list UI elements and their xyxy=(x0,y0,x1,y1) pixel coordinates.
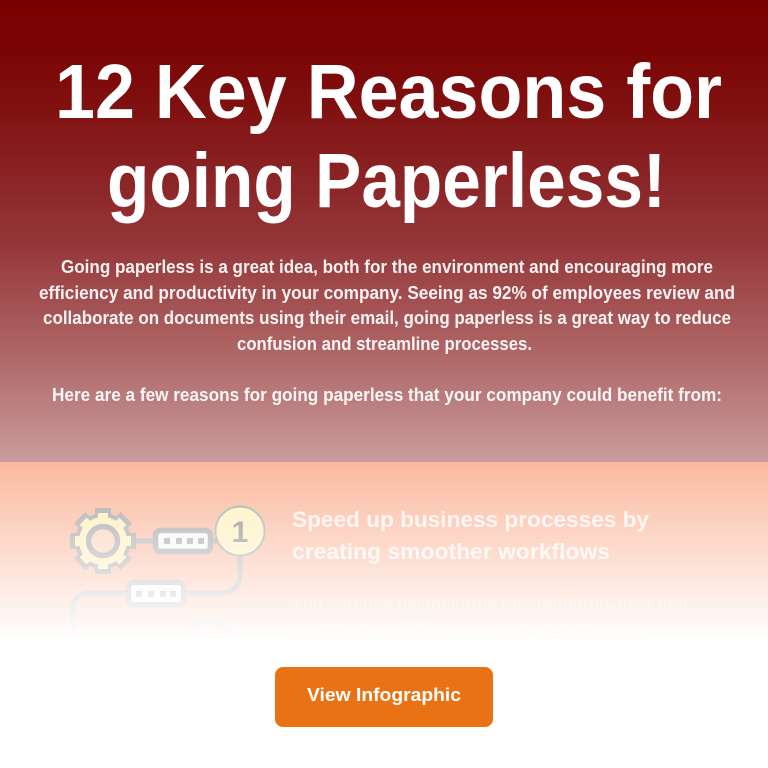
number badge 1 xyxy=(216,506,264,556)
icon: gear xyxy=(70,508,136,574)
next step circle xyxy=(187,622,233,668)
intro text block: Here are a few reasons for going paperless that your company could benefit from: xyxy=(52,385,722,405)
button: view infographic: View Infographic xyxy=(307,685,461,705)
peach panel: reason 1 background xyxy=(0,462,768,768)
reason 1 heading xyxy=(292,507,650,564)
title: 12 Key Reasons for xyxy=(55,49,722,135)
intro text block: efficiency and productivity in your company. Seeing as 92% of employees review and xyxy=(39,283,735,303)
process box 1 xyxy=(156,530,210,552)
reason 1 description: electronic signatures to speed up processes. xyxy=(292,619,645,639)
icon: gear and workflow diagram xyxy=(70,506,264,668)
intro text block: collaborate on documents using their email, going paperless is a great way to reduce xyxy=(43,308,731,328)
title xyxy=(55,49,722,224)
intro text block: Going paperless is a great idea, both for the environment and encouraging more xyxy=(61,257,713,277)
white fade overlay xyxy=(0,462,768,768)
connector lines xyxy=(73,541,240,660)
header background panel xyxy=(0,0,768,462)
process box 2 xyxy=(128,582,184,604)
reason 1 heading: Speed up business processes by xyxy=(292,507,650,532)
number badge 1: 1 xyxy=(232,516,248,549)
title: going Paperless! xyxy=(107,138,666,224)
intro text block xyxy=(39,257,735,405)
button: view infographic xyxy=(275,667,493,727)
intro text block: confusion and streamline processes. xyxy=(237,334,532,354)
reason 1 description xyxy=(292,594,688,639)
reason 1 heading: creating smoother workflows xyxy=(292,539,610,564)
reason 1 description: You can use digital forms for standardisation and xyxy=(292,594,688,614)
